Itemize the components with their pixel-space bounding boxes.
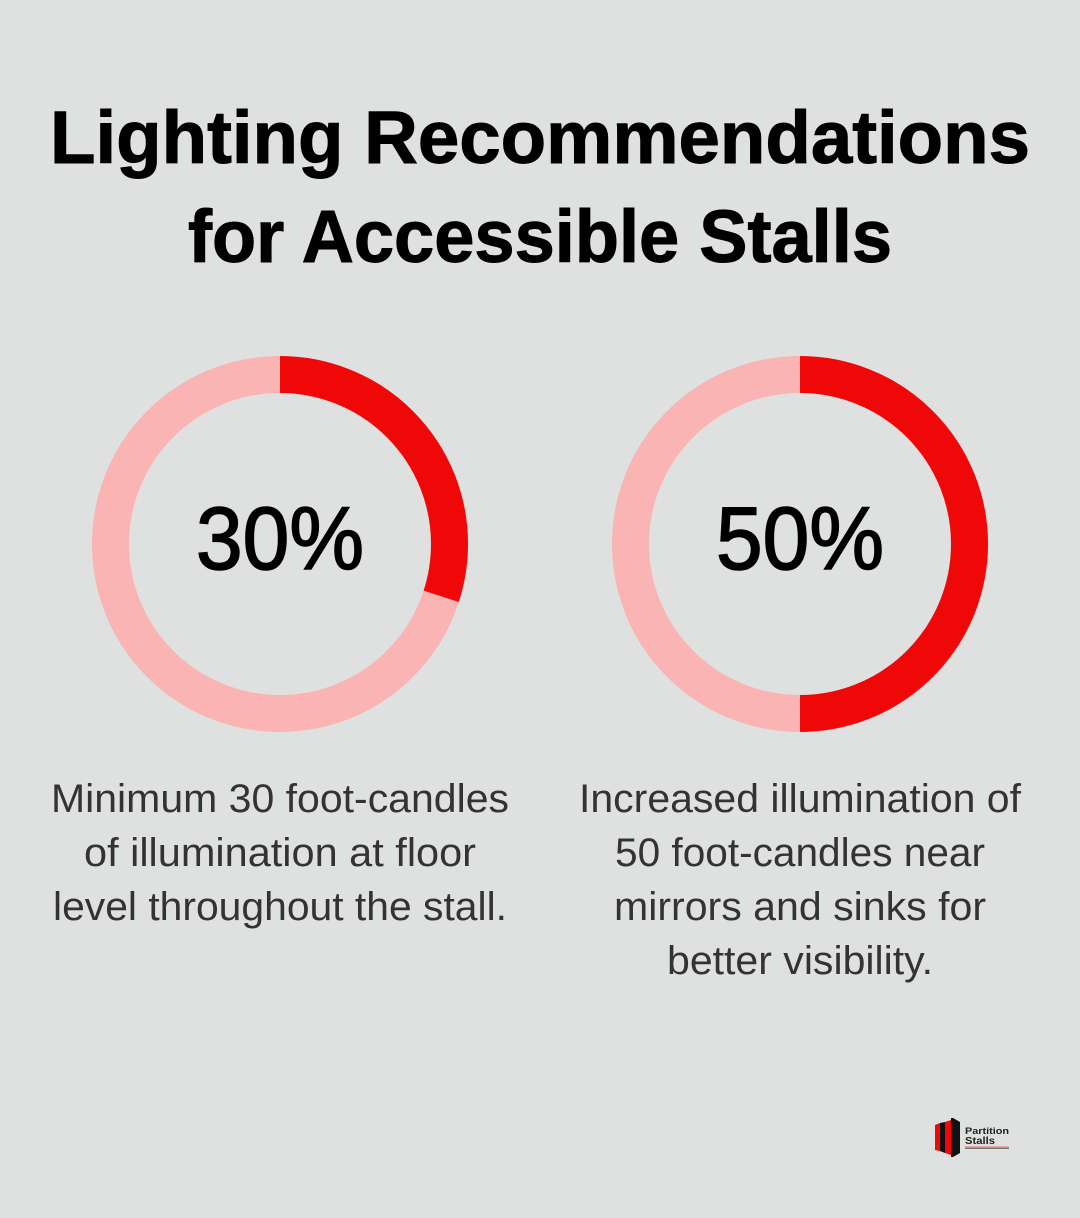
description: 30 foot-candles: of illumination at floor (84, 831, 476, 875)
panel: 50% stat (579, 374, 1022, 983)
title (50, 96, 1030, 278)
title: for Accessible Stalls (188, 195, 892, 278)
donut chart: 50% (630, 374, 970, 714)
icon: stall panels (935, 1118, 960, 1157)
panel: 30% stat (51, 374, 509, 929)
value: 30%: 30% (196, 488, 364, 588)
logo: Partition Stalls (935, 1118, 1009, 1157)
description: 50 foot-candles (579, 777, 1022, 983)
description: 30 foot-candles: level throughout the stall. (53, 885, 507, 929)
logo: Partition Stalls: Stalls (965, 1136, 995, 1147)
logo wordmark: Partition (965, 1126, 1009, 1137)
value: 50%: 50% (716, 488, 884, 588)
description: 50 foot-candles: mirrors and sinks for (614, 885, 986, 929)
description: 30 foot-candles (51, 777, 509, 929)
description: 30 foot-candles: Minimum 30 foot-candles (51, 777, 509, 821)
description: 50 foot-candles: better visibility. (667, 939, 933, 983)
description: 50 foot-candles: 50 foot-candles near (615, 831, 985, 875)
description: 50 foot-candles: Increased illumination of (579, 777, 1022, 821)
donut chart: 30% (110, 374, 450, 714)
title: Lighting Recommendations (50, 96, 1030, 179)
